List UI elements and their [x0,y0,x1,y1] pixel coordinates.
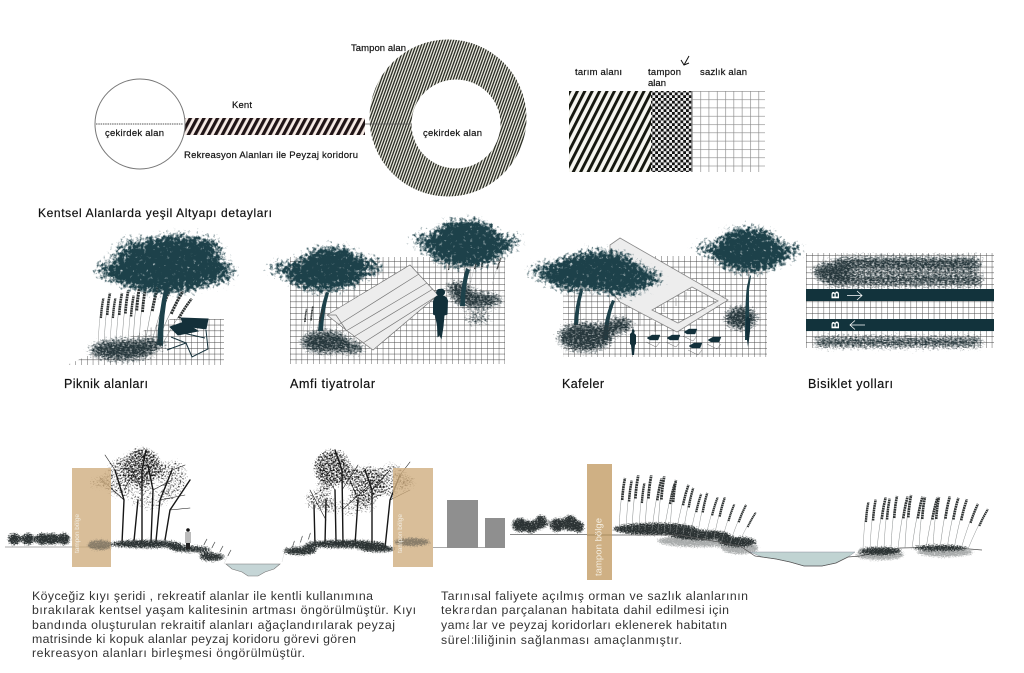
left understorey [107,539,226,562]
right tree canopy [406,217,525,270]
cafe chairs [647,329,721,348]
left core circle [95,79,185,169]
label: bike lanes: Bisiklet yolları [808,377,893,391]
arrow left [850,320,865,330]
building large [447,500,478,548]
upper planting [810,255,985,288]
left trees crowns [85,444,191,514]
steps [327,265,438,350]
lower planting [812,335,984,349]
section: reed wetland [510,464,988,580]
diagram: buffer pattern swatches [569,56,765,172]
text block: left paragraph: bandında oluşturulan rekraitif alanları ağaçlandırılarak peyzaj [32,618,395,632]
cafe chair legs [646,336,721,355]
right reed haze [854,546,975,561]
left tree trunks [574,290,615,340]
shrub [86,335,170,363]
grid floor [806,253,994,348]
left reed bed [611,522,758,548]
left tree canopy [263,244,388,294]
right tree canopy [690,225,808,275]
text block: right paragraph: tekrardan parçalanan habitata dahil edilmesi için [441,603,729,617]
text block: right paragraph: yamalar ve peyzaj koridorları eklenerek habitatın [441,618,727,632]
reeds [98,285,192,348]
text block: left paragraph [32,589,416,660]
right tree trunks [310,450,410,548]
text block: right paragraph: Tarımsal faliyete açılmış orman ve sazlık alanlarının [441,589,748,603]
left buffer zone [72,468,111,567]
buffer ring [370,40,526,197]
panel: cafes [523,225,808,357]
swatch: agriculture [569,91,651,172]
grid floor [67,319,224,365]
small trees [7,532,71,546]
right buffer text: tampon bölge [397,514,404,553]
left reeds [303,254,501,341]
text block: left paragraph: Köyceğiz kıyı şeridi , rekreatif alanlar ile kentli kullanımına [32,589,373,603]
corridor hatch [182,118,365,135]
lower lane [806,319,994,331]
right reeds [863,495,988,551]
label: reed area: sazlık alan [700,67,747,78]
people [630,316,750,355]
text block: left paragraph: rekreasyon alanları birleşmesi öngörülmüştür. [32,646,305,660]
building roof [610,238,728,332]
river [226,564,280,576]
buffer zone [587,464,612,580]
left tree trunk [318,292,329,331]
lane letter lower: B [830,321,842,329]
buffer text: tampon bölge [594,518,604,576]
chair [167,318,208,357]
tree canopy [89,232,240,296]
building small [485,518,505,548]
text block: right paragraph: sürekliliğinin sağlanması amaçlanmıştır. [441,633,682,647]
label: buffer two lines: alan [648,78,666,89]
arrow right [847,291,862,300]
right understorey [282,539,398,556]
orchard ground [510,534,612,536]
lane letter upper: B [830,291,842,299]
right trees crowns [301,446,420,520]
text block: left paragraph: matrisinde ki kopuk alanlar peyzaj koridoru görevi gören [32,632,356,646]
bank reeds [200,533,310,565]
right buffer zone [393,468,433,567]
left shrub [298,328,368,356]
label: right core: çekirdek alan [423,128,482,139]
label: city: Kent [232,100,252,111]
left trees canopy [523,248,668,298]
label: agriculture: tarım alanı [575,67,622,78]
tree trunk [157,285,169,346]
left tree trunks [100,450,190,543]
panel: picnic areas [67,232,240,365]
label: buffer: Tampon alan [351,43,406,54]
label: amphitheatres: Amfi tiyatrolar [290,377,375,391]
label: buffer two lines: tampon [648,67,681,78]
left buffer text: tampon bölge [74,514,81,553]
label: left core: çekirdek alan [105,128,164,139]
label: picnic: Piknik alanları [64,377,148,391]
diagram: landscape corridor concept [95,40,526,197]
label: cafes: Kafeler [562,377,604,391]
person silhouette [433,289,448,340]
right tree trunk [460,268,470,306]
swatch: buffer [651,91,692,172]
right buffer grass [392,537,432,547]
heading: Kentsel Alanlarda yeşil Altyapı detayları [38,206,272,220]
panel: bike lanes [806,253,994,349]
grid floor [563,256,767,357]
right reed bed [856,544,970,556]
left buffer grass [86,539,114,551]
right axis line [365,123,412,125]
right shrub [443,279,506,326]
text block: right paragraph [441,589,748,648]
text block: left paragraph: bırakılarak kentsel yaşam kalitesinin artması öngörülmüştür. Kıyı [32,603,416,617]
person [185,528,191,549]
label: corridor: Rekreasyon Alanları ile Peyzaj koridoru [184,150,358,161]
panel: amphitheatres [263,217,525,364]
building wall lines [625,292,686,332]
river [750,552,855,566]
ground profile [612,535,982,566]
grid floor [290,257,505,364]
section: urban riverside [5,444,505,576]
buffer ground line [587,534,612,536]
small orchard [511,514,585,534]
shrubs [555,304,760,354]
right tree trunk [745,275,751,340]
upper lane [806,289,994,301]
left reed haze [655,534,760,555]
left reeds [619,475,756,549]
swatch: reed area [692,91,765,172]
arrow: pointing to buffer [681,56,689,65]
ground line [5,546,485,548]
left axis line [96,123,183,125]
